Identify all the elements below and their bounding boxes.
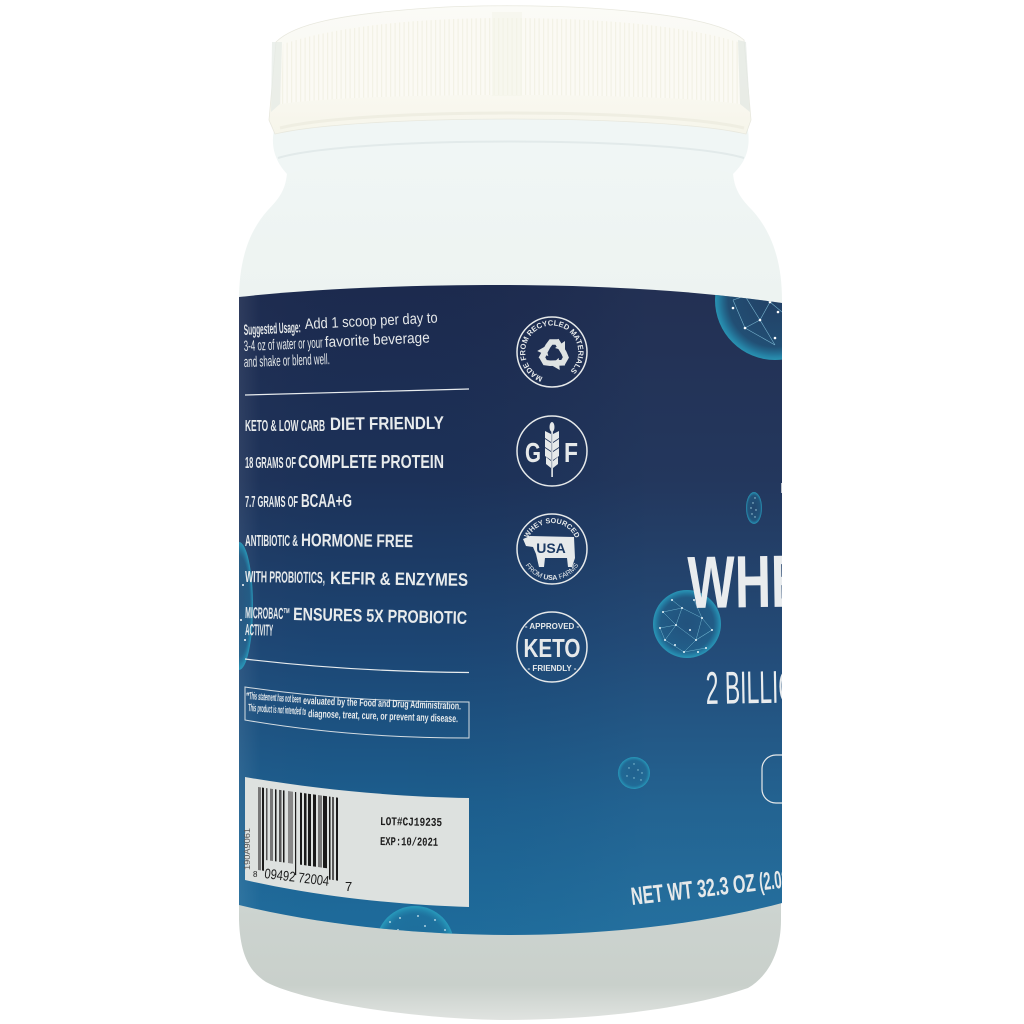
benefits list: ENSURES 5X PROBIOTIC [293, 604, 467, 628]
divider top [245, 389, 469, 395]
suggested usage text: Suggested Usage: [243, 319, 301, 339]
icon: keto approved: - FRIENDLY - [528, 664, 577, 673]
fda disclaimer box: This product is not intended to [248, 702, 306, 718]
product label [239, 285, 782, 935]
benefits list: ACTIVITY [245, 622, 273, 640]
sphere: bottom [380, 906, 452, 934]
neck shadow [278, 142, 744, 158]
icon: whey sourced usa: USA [536, 540, 566, 556]
icon: gluten free [517, 416, 587, 486]
benefits list: KEFIR & ENZYMES [330, 568, 468, 590]
sphere: small upper [746, 492, 762, 524]
benefits list: KETO & LOW CARB [245, 418, 325, 435]
benefits list: BCAA+G [301, 491, 352, 511]
divider bottom [245, 659, 469, 672]
icon: gluten free: F [564, 437, 578, 468]
benefits list: 7.7 GRAMS OF [245, 494, 298, 511]
wheat [545, 422, 559, 477]
icon: keto approved: KETO [524, 633, 580, 663]
suggested usage text: 3-4 oz of water or your [243, 335, 323, 355]
suggested usage text: and shake or blend well. [244, 351, 330, 371]
benefits list: WITH PROBIOTICS, [245, 569, 325, 587]
net weight [631, 870, 782, 905]
brand text fragment: N [780, 480, 791, 497]
sphere: top right [715, 295, 782, 360]
icon: keto approved [517, 612, 587, 682]
benefits list [245, 413, 468, 640]
icon: whey sourced usa [516, 513, 588, 585]
net weight: NET WT 32.3 OZ [630, 869, 757, 911]
suggested usage text [244, 313, 438, 368]
icon: gluten free: G [525, 437, 541, 468]
sphere: lower small [618, 757, 650, 789]
subtitle: 2 billion: 2 BILLION [705, 660, 813, 714]
icon: whey sourced usa: WHEY SOURCED [524, 518, 580, 538]
cap ribbing [281, 18, 740, 104]
suggested usage text: favorite beverage [324, 329, 430, 351]
barcode digits: 09492 72004 [264, 865, 330, 889]
cow [523, 536, 575, 567]
barcode digits [242, 828, 352, 894]
lot and expiry: EXP:10/2021 [380, 835, 438, 850]
barcode digits: 7 [345, 879, 352, 894]
bottle body [239, 156, 782, 1020]
benefits list: ANTIBIOTIC & [245, 533, 298, 550]
bottle cap [269, 6, 751, 134]
benefits list: DIET FRIENDLY [330, 413, 444, 434]
barcode digits: 8 [253, 870, 258, 879]
lot and expiry: LOT#CJ19235 [380, 815, 442, 830]
bottle neck ring [273, 116, 749, 174]
barcode panel [242, 777, 469, 907]
benefits list: MICROBAC™ [245, 605, 290, 623]
title: whey: WHEY [687, 539, 838, 624]
lot and expiry [380, 817, 442, 846]
benefits list: COMPLETE PROTEIN [298, 452, 444, 472]
net weight: (2.02 LB) [758, 862, 815, 896]
benefits list: HORMONE FREE [301, 530, 413, 551]
suggested usage text: Add 1 scoop per day to [304, 310, 438, 333]
sphere: left edge [239, 542, 253, 670]
barcode [258, 787, 338, 881]
flavor pill [761, 754, 782, 804]
icon: whey sourced usa: FROM USA FARMS [526, 562, 578, 580]
icon: keto approved: - APPROVED - [525, 622, 580, 631]
benefits list: 18 GRAMS OF [245, 455, 296, 472]
barcode digits: 190A9061 [242, 828, 252, 870]
fda disclaimer box: **This statement has not been [246, 690, 301, 706]
recycle arrows [537, 340, 572, 372]
icon: made from recycled materials: MADE FROM RECYCLED MATERIALS [520, 320, 584, 382]
fda disclaimer box [245, 687, 469, 738]
fda disclaimer box: diagnose, treat, cure, or prevent any disease. [308, 708, 458, 725]
sphere: main [653, 590, 721, 658]
fda disclaimer box: evaluated by the Food and Drug Administration. [303, 695, 461, 713]
